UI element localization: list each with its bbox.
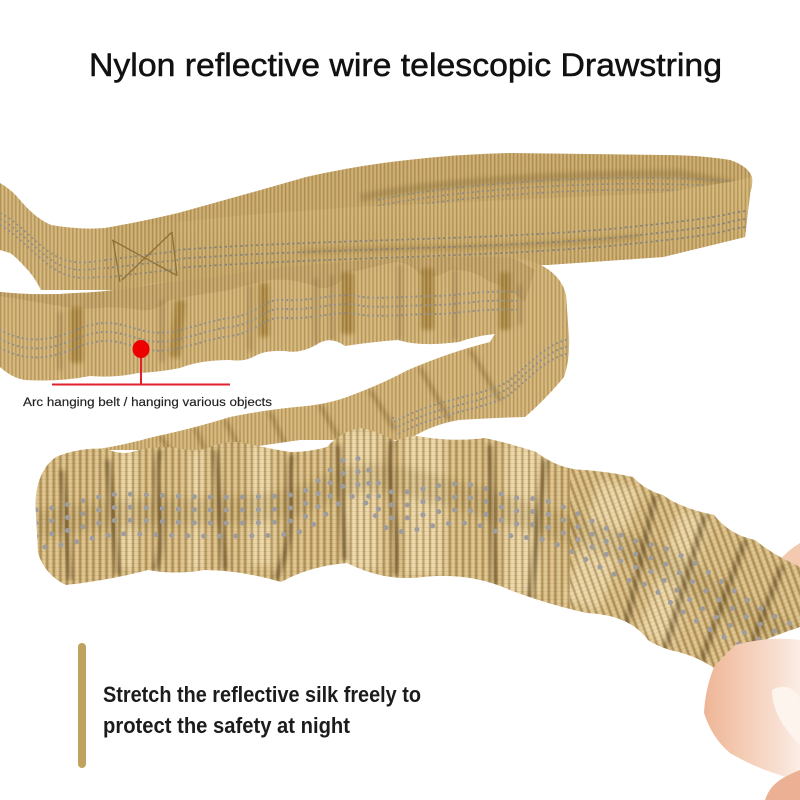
dark band behind reflective rows — [36, 477, 800, 640]
reflective dotted rows — [36, 457, 800, 660]
callout: arc hanging belt — [23, 340, 272, 409]
callout text: Arc hanging belt / hanging various objects — [23, 397, 272, 409]
body text: reflective silk note: Stretch the reflective silk freely to — [103, 682, 421, 707]
hand: finger above strap end — [778, 543, 800, 572]
ribbing straight — [36, 428, 570, 609]
reflective dotted rows — [0, 292, 566, 435]
ribbing tilted — [570, 468, 800, 668]
fold creases — [62, 440, 782, 665]
hand: thumb holding the strap — [704, 639, 800, 800]
loop back band — [100, 150, 760, 295]
lower curve creases — [160, 350, 500, 450]
inner face visible above pleats — [0, 256, 535, 310]
title: Nylon reflective wire telescopic Drawstring — [89, 47, 722, 83]
accent bar — [78, 643, 86, 768]
strap: gathered middle section — [0, 250, 580, 455]
loop front band — [178, 177, 752, 282]
stitched patches — [70, 268, 511, 363]
left strap tail — [0, 183, 122, 290]
ribbing overlay — [0, 250, 580, 455]
body text: reflective silk note — [103, 682, 421, 738]
callout leader line — [52, 350, 230, 384]
light pleats — [120, 430, 710, 650]
pleat shadows — [60, 265, 520, 370]
stitched box tab — [105, 221, 181, 287]
body text: reflective silk note: protect the safety at night — [103, 713, 351, 738]
callout red dot — [132, 340, 150, 358]
strap: large stretched section in foreground — [30, 420, 800, 680]
strap: upper handle loop — [0, 150, 760, 295]
